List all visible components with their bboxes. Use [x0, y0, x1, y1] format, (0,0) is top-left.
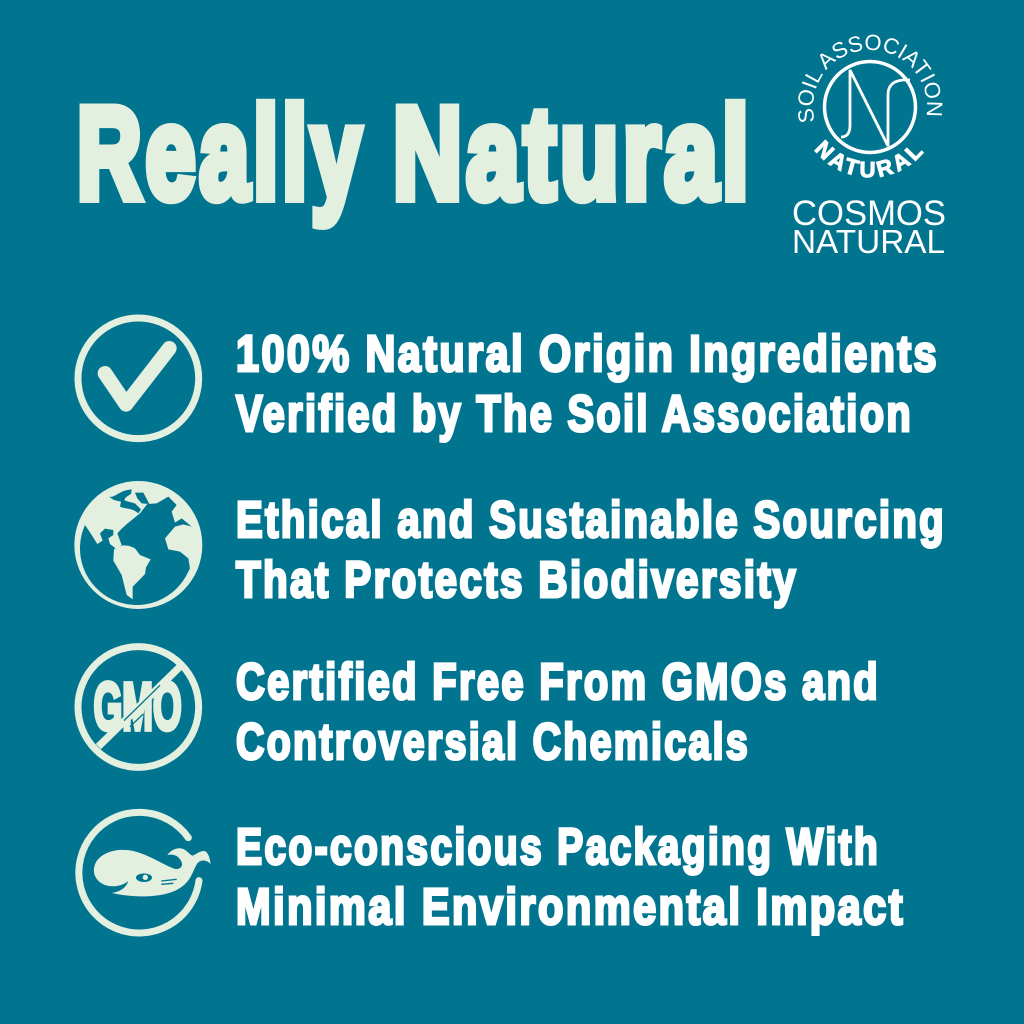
- title: Natural: [393, 80, 753, 226]
- text: natural origin: [236, 325, 939, 442]
- title: [77, 80, 753, 226]
- badge: NATURAL: NATURAL: [792, 223, 945, 260]
- icon: check mark: [78, 318, 199, 439]
- badge arc text: SOIL ASSOCIATION: [798, 34, 942, 122]
- text: GMO free: [236, 653, 880, 770]
- badge: Soil Association Cosmos Natural: [792, 34, 946, 260]
- badge N monogram: [841, 70, 910, 146]
- icon: no GMO: GMO: [94, 670, 182, 744]
- badge ring: [824, 62, 916, 152]
- text: packaging: [236, 818, 905, 935]
- icon: globe: [74, 481, 202, 609]
- icon: whale: [79, 812, 211, 933]
- title: Really: [77, 80, 365, 226]
- badge: COSMOS: COSMOS: [792, 194, 946, 233]
- badge arc label: NATURAL: [814, 139, 924, 178]
- text: sourcing: That Protects Biodiversity: [236, 551, 798, 608]
- text: GMO free: Controversial Chemicals: [236, 713, 750, 770]
- icon: no GMO: [78, 647, 199, 767]
- text: sourcing: [236, 491, 946, 608]
